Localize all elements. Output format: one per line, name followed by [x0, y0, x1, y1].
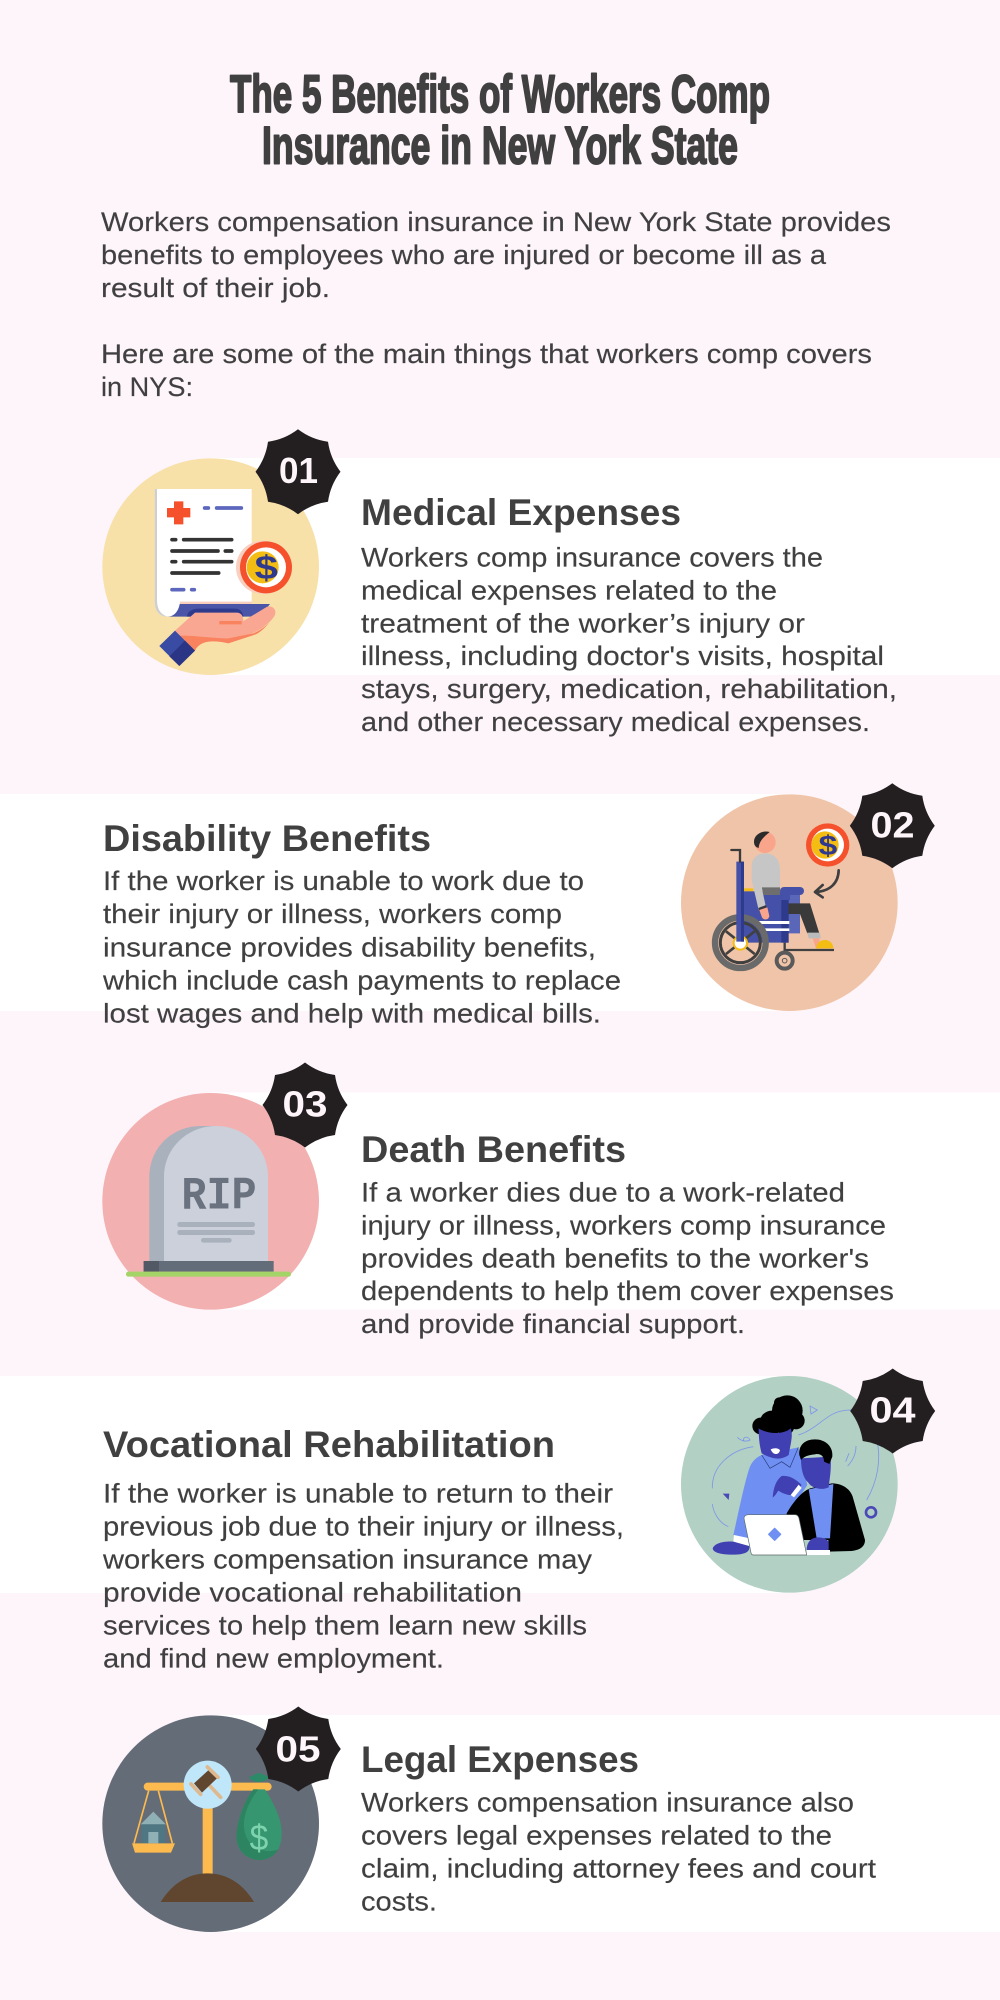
body: vocational rehabilitation: services to help them learn new skills	[103, 1610, 587, 1640]
heading: vocational rehabilitation: Vocational Rehabilitation	[103, 1424, 555, 1465]
icon: person in wheelchair with coin	[681, 794, 898, 1011]
body: medical expenses: and other necessary medical expenses.	[361, 707, 870, 737]
body: medical expenses: stays, surgery, medication, rehabilitation,	[361, 674, 897, 704]
body: legal expenses: costs.	[361, 1886, 437, 1916]
panel: legal expenses	[102, 1706, 1000, 1932]
panel: medical expenses	[102, 429, 1000, 737]
intro text: benefits to employees who are injured or become ill as a	[101, 240, 827, 270]
body: vocational rehabilitation: and find new employment.	[103, 1644, 444, 1674]
icon: gravestone	[102, 1093, 319, 1310]
body: legal expenses: Workers compensation insurance also	[361, 1788, 854, 1818]
body: disability benefits	[102, 866, 621, 1028]
panel: vocational rehabilitation	[0, 1368, 935, 1674]
body: disability benefits: If the worker is unable to work due to	[103, 866, 584, 896]
body: disability benefits: lost wages and help with medical bills.	[103, 998, 601, 1028]
badge: 03	[262, 1062, 348, 1148]
badge: 04: 04	[870, 1390, 916, 1430]
body: death benefits: injury or illness, workers comp insurance	[361, 1210, 886, 1240]
body: medical expenses: Workers comp insurance covers the	[361, 542, 823, 572]
badge: 02: 02	[870, 804, 914, 846]
panel: death benefits	[102, 1062, 1000, 1339]
badge: 02	[850, 783, 935, 868]
title: Insurance in New York State	[262, 116, 738, 176]
body: death benefits: If a worker dies due to a work-related	[361, 1178, 845, 1208]
icon: two people at a laptop	[681, 1376, 898, 1593]
intro text: in NYS:	[101, 372, 193, 402]
heading: medical expenses: Medical Expenses	[361, 492, 681, 533]
body: legal expenses	[361, 1788, 877, 1916]
heading: legal expenses: Legal Expenses	[361, 1739, 639, 1780]
body: medical expenses: treatment of the worker’s injury or	[361, 608, 805, 638]
body: disability benefits: their injury or illness, workers comp	[103, 899, 562, 929]
intro text: result of their job.	[101, 273, 330, 303]
body: legal expenses: claim, including attorney fees and court	[361, 1854, 877, 1884]
panel: disability benefits	[0, 783, 935, 1028]
title	[230, 65, 770, 176]
icon: scales with house, gavel and money bag	[102, 1715, 319, 1932]
body: medical expenses	[361, 542, 897, 737]
intro text: Workers compensation insurance in New York State provides	[101, 207, 891, 237]
intro text: Here are some of the main things that workers comp covers	[101, 339, 872, 369]
body: disability benefits: which include cash payments to replace	[102, 966, 621, 996]
icon: medical bill in hand with coin: $	[255, 550, 279, 587]
badge: 01: 01	[279, 450, 318, 491]
badge: 03: 03	[282, 1084, 328, 1124]
badge: 05	[256, 1706, 341, 1792]
heading: disability benefits: Disability Benefits	[103, 818, 431, 859]
badge: 04	[850, 1368, 935, 1454]
badge: 01	[256, 429, 340, 514]
intro text	[101, 207, 891, 402]
body: medical expenses: illness, including doctor's visits, hospital	[361, 641, 884, 671]
icon: scales with house, gavel and money bag: $	[250, 1817, 268, 1858]
body: death benefits: provides death benefits to the worker's	[361, 1244, 869, 1274]
icon: person in wheelchair with coin: $	[819, 830, 838, 861]
icon: medical bill in hand with coin	[102, 458, 319, 675]
body: vocational rehabilitation: previous job due to their injury or illness,	[103, 1512, 624, 1542]
body: death benefits: dependents to help them cover expenses	[361, 1276, 894, 1306]
heading: death benefits: Death Benefits	[361, 1129, 626, 1170]
body: vocational rehabilitation: workers compensation insurance may	[102, 1544, 593, 1574]
body: vocational rehabilitation: provide vocational rehabilitation	[103, 1578, 522, 1608]
icon: gravestone: RIP	[181, 1170, 257, 1223]
body: death benefits: and provide financial support.	[361, 1309, 745, 1339]
body: disability benefits: insurance provides disability benefits,	[103, 932, 596, 962]
body: medical expenses: medical expenses related to the	[361, 576, 777, 606]
body: death benefits	[361, 1178, 894, 1339]
body: vocational rehabilitation	[102, 1478, 624, 1674]
body: vocational rehabilitation: If the worker is unable to return to their	[103, 1478, 613, 1508]
body: legal expenses: covers legal expenses related to the	[361, 1820, 832, 1850]
badge: 05: 05	[276, 1728, 320, 1770]
